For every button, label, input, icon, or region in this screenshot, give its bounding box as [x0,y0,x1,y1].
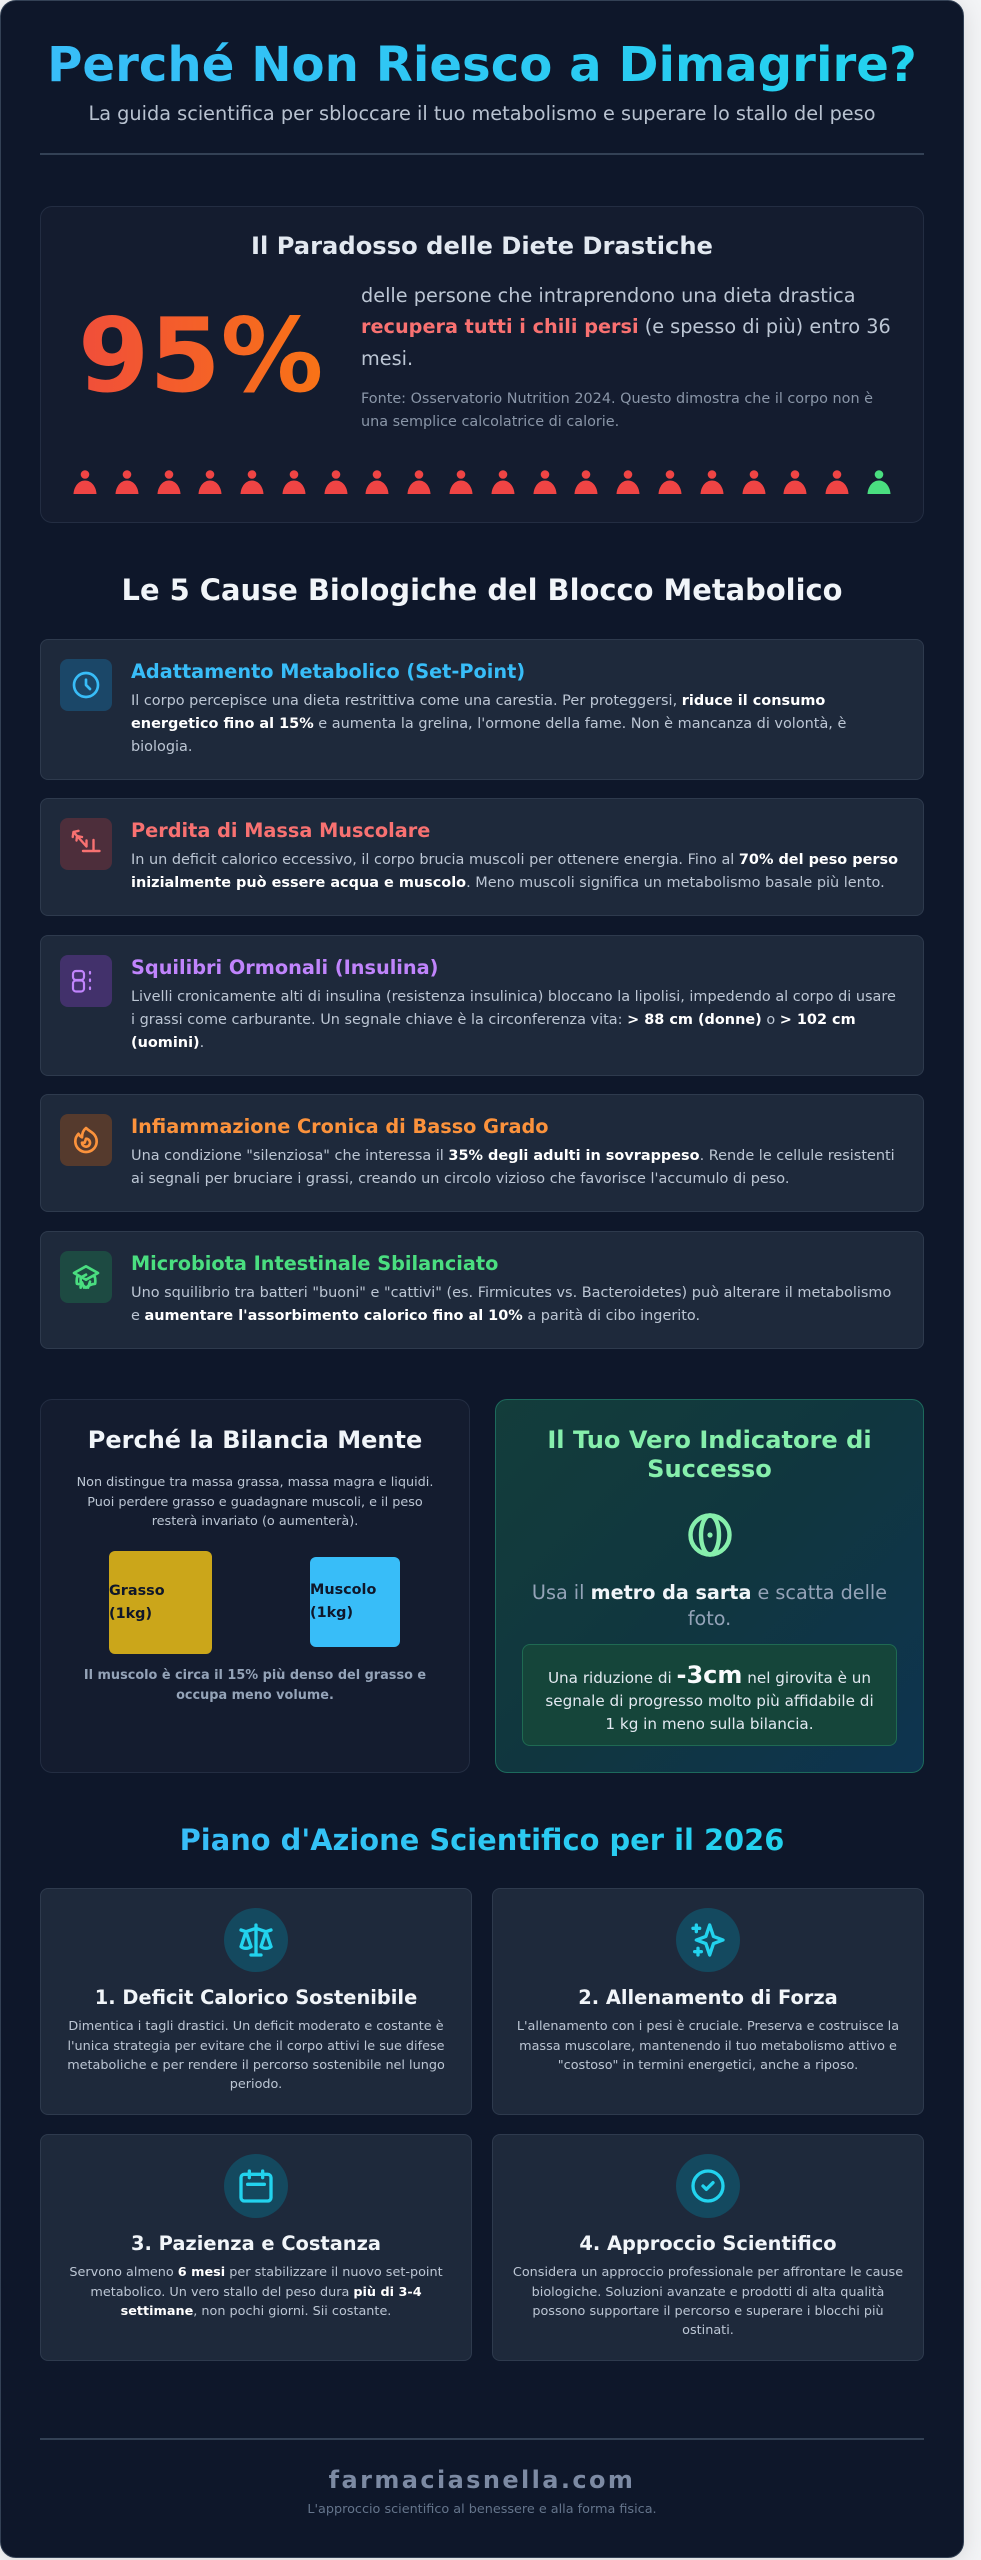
plan 4 text: Considera un approccio professionale per affrontare le cause biologiche. Soluzioni avanzate e prodotti di alta qualità possono supportare il percorso e superare i blocchi più ostinati. [513,2265,903,2338]
plan 3 text: Servono almeno 6 mesi per stabilizzare il nuovo set-point metabolico. Un vero stallo del peso dura più di 3-4 settimane, non pochi giorni. Sii costante. [69,2265,443,2319]
cause 5 text: e aumentare l'assorbimento calorico fino al 10% a parità di cibo ingerito. [131,1308,700,1324]
icon: target [688,1513,732,1557]
cause 3 text [131,989,896,1051]
indicator text: Usa il metro da sarta e scatta delle foto. [532,1581,887,1630]
cause 1 title: Adattamento Metabolico (Set-Point) [131,660,525,683]
panel: plan 2 [492,1888,924,2115]
cause 2 text: inizialmente può essere acqua e muscolo. Meno muscoli significa un metabolismo basale più lento. [131,875,885,891]
title: Perché Non Riesco a Dimagrire? [47,37,917,93]
icon: hormone blocks [60,955,112,1007]
icon: check circle [676,2154,740,2218]
cause 4 title: Infiammazione Cronica di Basso Grado [131,1115,549,1138]
callout: waist reduction [522,1644,897,1746]
indicator heading: Il Tuo Vero Indicatore di Successo [547,1426,872,1482]
icon: calendar [224,2154,288,2218]
scale panel heading: Perché la Bilancia Mente [88,1426,422,1454]
subtitle: La guida scientifica per sbloccare il tuo metabolismo e superare lo stallo del peso [88,102,876,125]
icon: clock [60,659,112,711]
muscle block [310,1557,400,1647]
panel: cause 5 microbiota [40,1231,924,1349]
heading: five causes: Le 5 Cause Biologiche del Blocco Metabolico [122,573,842,607]
paradox heading: Il Paradosso delle Diete Drastiche [251,232,713,260]
callout: waist reduction: segnale di progresso molto più affidabile di [545,1692,874,1710]
icon: sparkles [676,1908,740,1972]
cause 5 title: Microbiota Intestinale Sbilanciato [131,1252,498,1275]
plan 1 title: 1. Deficit Calorico Sostenibile [95,1986,417,2009]
icon: flame [60,1114,112,1166]
icon: microbiota cap [60,1251,112,1303]
scale panel text: Non distingue tra massa grassa, massa magra e liquidi. Puoi perdere grasso e guadagnare muscoli, e il peso resterà invariato (o aumenterà). [77,1475,433,1529]
cause 4 text: ai segnali per bruciare i grassi, creando un circolo vizioso che favorisce l'accumulo di peso. [131,1171,789,1187]
heading: action plan: Piano d'Azione Scientifico per il 2026 [180,1823,784,1857]
muscle block: Muscolo [310,1582,376,1598]
plan 2 title: 2. Allenamento di Forza [578,1986,838,2009]
cause 3 text: Livelli cronicamente alti di insulina (resistenza insulinica) bloccano la lipolisi, impedendo al corpo di usare [131,989,896,1005]
cause 3 title: Squilibri Ormonali (Insulina) [131,956,438,979]
cause 1 text: energetico fino al 15% e aumenta la grelina, l'ormone della fame. Non è mancanza di volontà, è [131,716,846,732]
cause 2 title: Perdita di Massa Muscolare [131,819,430,842]
cause 5 text: Uno squilibrio tra batteri "buoni" e "cattivi" (es. Firmicutes vs. Bacteroidetes) può alterare il metabolismo [131,1285,891,1301]
density caption: Il muscolo è circa il 15% più denso del grasso e occupa meno volume. [84,1668,426,1703]
panel: why the scale lies [40,1399,470,1773]
people pictogram: 19 of 20 regain weight [74,470,890,494]
cause 1 text: Il corpo percepisce una dieta restrittiva come una carestia. Per proteggersi, riduce il consumo [131,693,825,709]
footer brand: farmaciasnella.com [329,2466,635,2494]
muscle block: (1kg) [310,1605,353,1621]
fat block: Grasso [109,1582,165,1598]
cause 4 text: Una condizione "silenziosa" che interessa il 35% degli adulti in sovrappeso. Rende le cellule resistenti [131,1148,895,1164]
panel: cause 1 metabolic adaptation [40,639,924,780]
cause 3 text: (uomini). [131,1035,204,1051]
panel: plan 4 [492,2134,924,2361]
cause 3 text: i grassi come carburante. Un segnale chiave è la circonferenza vita: > 88 cm (donne) o > 102 cm [131,1012,856,1028]
panel: plan 3 [40,2134,472,2361]
plan 4 title: 4. Approccio Scientifico [579,2232,837,2255]
icon: scale [224,1908,288,1972]
callout: waist reduction: 1 kg in meno sulla bilancia. [605,1715,814,1733]
fat block: (1kg) [109,1606,152,1622]
panel: true success indicator [495,1399,924,1773]
panel: diet paradox [40,206,924,523]
cause 2 text: In un deficit calorico eccessivo, il corpo brucia muscoli per ottenere energia. Fino al 70% del peso perso [131,852,898,868]
cause 2 text [131,852,898,891]
plan 2 text: L'allenamento con i pesi è cruciale. Preserva e costruisce la massa muscolare, mantenendo il tuo metabolismo attivo e "costoso" in termini energetici, anche a riposo. [517,2019,899,2073]
source note: Fonte: Osservatorio Nutrition 2024. Questo dimostra che il corpo non è una semplice calcolatrice di calorie. [361,390,873,430]
cause 4 text [131,1148,895,1187]
fat block [109,1551,212,1654]
cause 1 text: biologia. [131,739,192,755]
plan 3 title: 3. Pazienza e Costanza [131,2232,381,2255]
callout: waist reduction: Una riduzione di -3cm nel girovita è un [548,1661,871,1689]
statistic description: delle persone che intraprendono una dieta drastica recupera tutti i chili persi (e spesso di più) entro 36 mesi. [361,284,891,370]
footer tagline: L'approccio scientifico al benessere e alla forma fisica. [307,2502,657,2517]
plan 1 text: Dimentica i tagli drastici. Un deficit moderato e costante è l'unica strategia per evitare che il corpo attivi le sue difese metaboliche e per rendere il percorso sostenibile nel lungo periodo. [67,2019,445,2092]
cause 1 text [131,693,846,755]
panel: cause 4 inflammation [40,1094,924,1212]
panel: cause 3 hormones [40,935,924,1076]
icon: muscle trend [60,818,112,870]
panel: cause 2 muscle loss [40,798,924,916]
panel: plan 1 [40,1888,472,2115]
95 percent statistic: 95% [78,297,323,416]
cause 5 text [131,1285,891,1324]
